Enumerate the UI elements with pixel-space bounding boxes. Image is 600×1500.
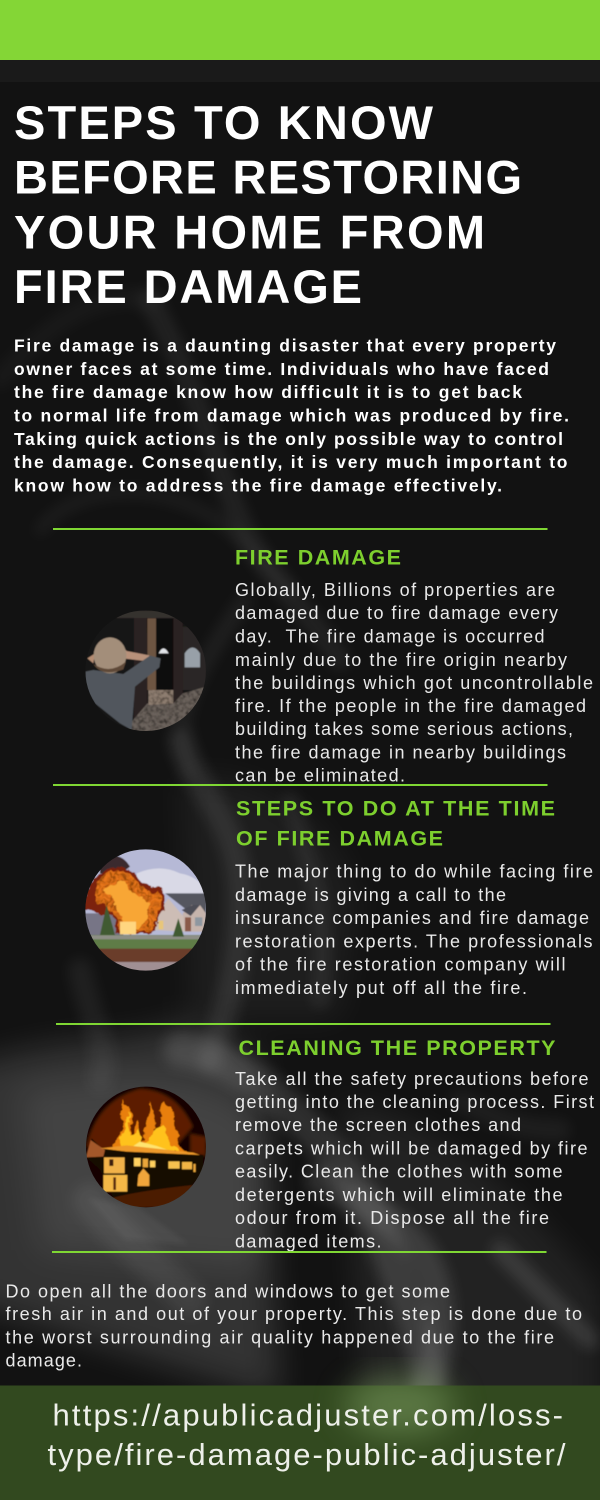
text: fire damage body: Globally, Billions of properties are bbox=[235, 580, 555, 600]
text: fire damage body bbox=[235, 580, 593, 786]
intro paragraph bbox=[14, 336, 569, 496]
intro paragraph: the damage. Consequently, it is very much important to bbox=[14, 452, 568, 472]
text: cleaning body: odour from it. Dispose all the fire bbox=[235, 1208, 549, 1228]
text: steps body: immediately put off all the fire. bbox=[235, 978, 527, 998]
text: fire damage body: mainly due to the fire origin nearby bbox=[235, 650, 567, 670]
heading: steps to do: OF FIRE DAMAGE bbox=[236, 827, 443, 851]
green divider 3 bbox=[56, 1023, 550, 1025]
text: fire damage body: can be eliminated. bbox=[235, 766, 405, 786]
intro paragraph: know how to address the fire damage effectively. bbox=[14, 476, 502, 496]
heading: fire damage: FIRE DAMAGE bbox=[235, 545, 401, 569]
intro paragraph: Fire damage is a daunting disaster that every property bbox=[14, 336, 556, 356]
closing paragraph bbox=[6, 1281, 582, 1371]
text: cleaning body bbox=[235, 1069, 594, 1251]
heading: steps to do bbox=[236, 797, 555, 851]
text: cleaning body: carpets which will be damaged by fire bbox=[235, 1138, 588, 1158]
intro paragraph: to normal life from damage which was produced by fire. bbox=[14, 406, 569, 426]
heading: cleaning: CLEANING THE PROPERTY bbox=[238, 1036, 556, 1060]
text: fire damage body: the buildings which got uncontrollable bbox=[235, 673, 593, 693]
title bbox=[14, 96, 522, 313]
green divider 1 bbox=[53, 528, 548, 530]
top green band bbox=[0, 0, 600, 60]
title: BEFORE RESTORING bbox=[14, 150, 522, 203]
text: cleaning body: detergents which will eliminate the bbox=[235, 1185, 562, 1205]
footer band with url bbox=[0, 1375, 600, 1500]
panel: fire damage bbox=[83, 545, 593, 786]
text: steps body: insurance companies and fire damage bbox=[235, 908, 589, 928]
intro paragraph: owner faces at some time. Individuals who have faced bbox=[14, 359, 549, 379]
text: fire damage body: damaged due to fire damage every bbox=[235, 603, 558, 623]
icon: house on fire photo bbox=[83, 847, 208, 973]
text: steps body: of the fire restoration company will bbox=[235, 955, 566, 975]
green divider 2 bbox=[53, 784, 548, 786]
title: STEPS TO KNOW bbox=[14, 96, 434, 149]
icon: woman in burned house photo bbox=[83, 608, 208, 733]
text: fire damage body: the fire damage in nearby buildings bbox=[235, 742, 566, 762]
panel: steps to do bbox=[83, 797, 593, 998]
intro paragraph: the fire damage know how difficult it is to get back bbox=[14, 382, 522, 402]
closing paragraph: fresh air in and out of your property. This step is done due to bbox=[6, 1304, 582, 1324]
panel: cleaning the property bbox=[83, 1036, 594, 1251]
title: YOUR HOME FROM bbox=[14, 205, 485, 258]
text: cleaning body: remove the screen clothes and bbox=[235, 1115, 521, 1135]
text: fire damage body: building takes some serious actions, bbox=[235, 719, 573, 739]
heading: steps to do: STEPS TO DO AT THE TIME bbox=[236, 797, 555, 821]
text: steps body: restoration experts. The professionals bbox=[235, 931, 592, 951]
closing paragraph: the worst surrounding air quality happened due to the fire bbox=[6, 1327, 554, 1347]
text: cleaning body: damaged items. bbox=[235, 1231, 382, 1251]
title: FIRE DAMAGE bbox=[14, 260, 362, 313]
url text: https://apublicadjuster.com/loss- bbox=[52, 1398, 563, 1433]
green divider 4 bbox=[52, 1251, 546, 1253]
url text bbox=[48, 1398, 566, 1472]
text: steps body: damage is giving a call to the bbox=[235, 885, 506, 905]
text: steps body bbox=[235, 862, 593, 998]
url text: type/fire-damage-public-adjuster/ bbox=[48, 1437, 566, 1472]
icon: burning house at night photo bbox=[83, 1085, 208, 1210]
text: cleaning body: Take all the safety precautions before bbox=[235, 1069, 588, 1089]
text: fire damage body: fire. If the people in the fire damaged bbox=[235, 696, 586, 716]
footer band bbox=[0, 1386, 600, 1500]
closing paragraph: damage. bbox=[6, 1351, 82, 1371]
intro paragraph: Taking quick actions is the only possible way to control bbox=[14, 429, 563, 449]
background smoke bbox=[0, 298, 600, 1480]
header shade strip bbox=[0, 60, 600, 82]
text: fire damage body: day. The fire damage is occurred bbox=[235, 626, 544, 646]
text: steps body: The major thing to do while facing fire bbox=[235, 862, 593, 882]
footer smoke highlight bbox=[345, 1375, 455, 1435]
closing paragraph: Do open all the doors and windows to get some bbox=[6, 1281, 450, 1301]
text: cleaning body: easily. Clean the clothes with some bbox=[235, 1162, 562, 1182]
text: cleaning body: getting into the cleaning process. First bbox=[235, 1092, 594, 1112]
